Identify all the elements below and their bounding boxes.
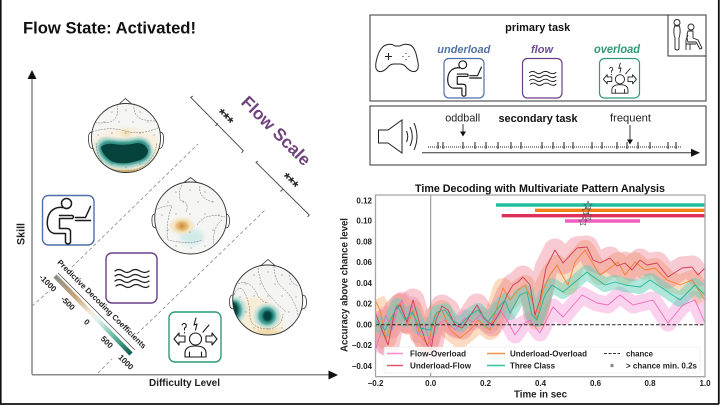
underload icon box (42, 196, 94, 245)
icon: standing and sitting postures (668, 15, 706, 56)
colour bar (37, 258, 149, 372)
x axis ticks (368, 379, 711, 388)
arrow: frequent marker (627, 125, 633, 144)
y axis ticks (352, 196, 373, 371)
y axis ticks: −0.04 (352, 362, 373, 371)
y axis ticks: 0.02 (356, 300, 373, 309)
topomap: underload (88, 98, 164, 176)
colour bar: 500 (99, 334, 115, 351)
chart: time decoding (340, 183, 711, 400)
y axis ticks: 0.06 (356, 258, 373, 267)
x axis ticks: 0.4 (535, 379, 547, 388)
legend: Underload-Overload (510, 349, 587, 358)
colour bar: Predictive Decoding Coefficients (55, 258, 149, 351)
flow icon box (106, 253, 157, 303)
x axis ticks: 0.8 (644, 379, 656, 388)
condition: underload (437, 44, 491, 98)
y axis ticks: 0.10 (356, 217, 373, 226)
stimulus timeline (422, 142, 700, 157)
label: frequent: frequent (610, 112, 651, 124)
heading: secondary task: secondary task (498, 113, 578, 125)
x axis ticks: 0.2 (480, 379, 492, 388)
y axis ticks: 0.12 (356, 196, 373, 206)
arrow: oddball marker (460, 124, 466, 136)
chart title: Time Decoding with Multivariate Pattern Analysis (415, 183, 665, 195)
condition: overload (594, 44, 641, 98)
y axis ticks: −0.02 (352, 341, 373, 350)
y axis ticks: 0.04 (356, 279, 373, 288)
panel: primary task (370, 15, 706, 101)
y axis ticks: 0.08 (356, 238, 373, 246)
legend: Flow-Overload (410, 349, 466, 358)
flow diagram (16, 70, 338, 389)
colour bar: -1000 (37, 273, 59, 294)
peak stars (579, 201, 592, 225)
y axis ticks: 0.00 (356, 320, 373, 330)
topomap: flow (152, 178, 230, 254)
legend (384, 347, 700, 373)
x axis: difficulty level: Difficulty Level (149, 377, 220, 389)
condition: overload: overload (594, 44, 641, 56)
heading: primary task: primary task (505, 22, 571, 34)
y axis label: Accuracy above chance level (340, 218, 350, 352)
y axis: skill: Skill (16, 223, 28, 245)
icon: game controller (376, 44, 418, 72)
condition: flow: flow (531, 44, 554, 56)
title: Flow State: Activated! (23, 20, 196, 38)
flow scale label: Flow Scale (237, 92, 315, 170)
significance bracket lower (256, 161, 309, 217)
significance bracket upper: *** (212, 106, 236, 130)
x axis ticks: 0.0 (425, 379, 437, 388)
colour bar: 1000 (116, 353, 136, 372)
flow band dashed boundaries (32, 144, 265, 373)
significance bars (496, 205, 705, 221)
panel: secondary task (370, 106, 706, 165)
x axis label: Time in sec (514, 390, 568, 400)
legend: Underload-Flow (410, 361, 472, 370)
x axis ticks: 1.0 (699, 379, 711, 388)
plot frame (376, 195, 705, 377)
legend: chance (626, 349, 654, 358)
y axis: skill (16, 70, 36, 374)
legend: > chance min. 0.2s (626, 361, 698, 370)
condition: flow (522, 44, 562, 98)
colour bar: 0 (82, 317, 92, 327)
significance bracket upper (191, 96, 243, 153)
icon: speaker (378, 120, 417, 153)
label: oddball: oddball (445, 112, 480, 124)
condition: underload: underload (437, 44, 491, 56)
topomap: overload (224, 260, 306, 338)
x axis ticks: −0.2 (368, 379, 384, 388)
x axis ticks: 0.6 (590, 379, 602, 388)
legend: Three Class (510, 361, 556, 370)
colour bar: -500 (59, 294, 77, 312)
significance bracket lower: *** (277, 170, 301, 194)
overload icon box (169, 312, 221, 362)
x axis: difficulty level (32, 370, 338, 389)
error bands and mean lines (375, 195, 705, 377)
